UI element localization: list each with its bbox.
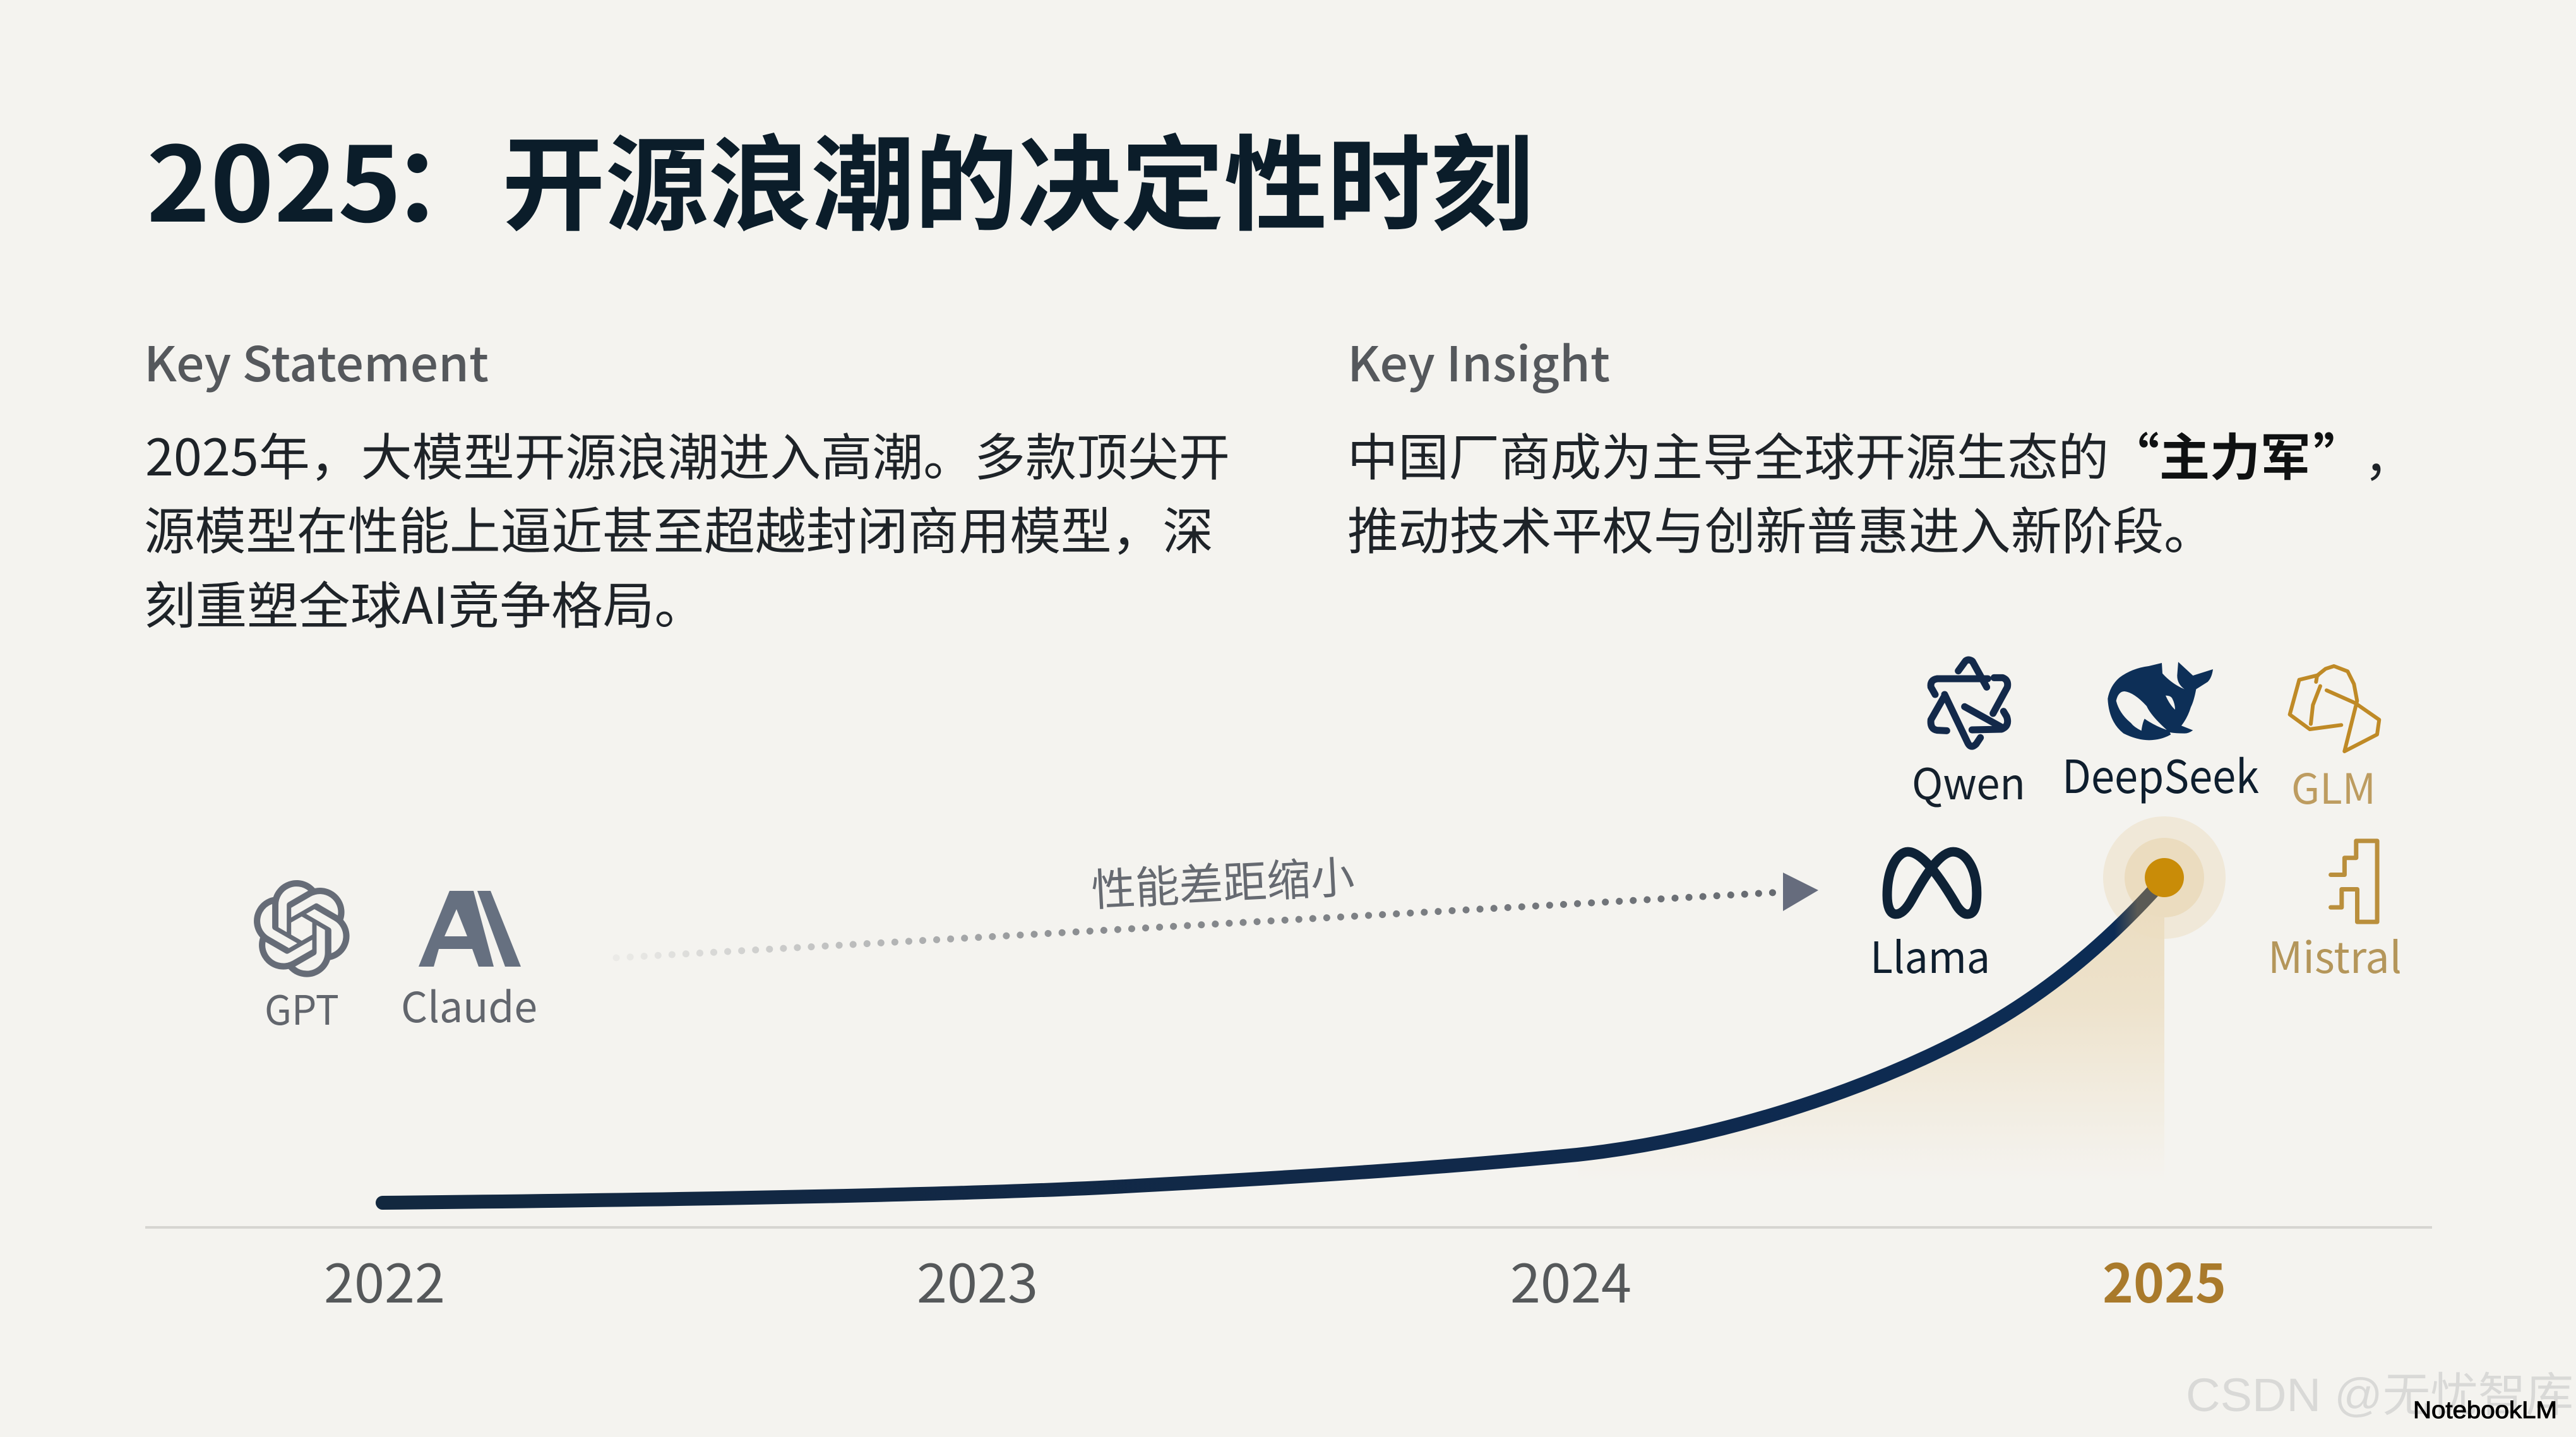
year label 2023: 2023 [917, 1242, 1038, 1318]
icon: Qwen star [1931, 660, 2008, 746]
text block: key statement body: 源模型在性能上逼近甚至超越封闭商用模型，深 [144, 491, 1213, 564]
text block: key insight body: ， [2364, 417, 2414, 491]
heading: key statement: Key Statement [144, 326, 489, 395]
dotted arrow line [616, 892, 1782, 958]
text block: key insight body: 中国厂商成为主导全球开源生态的 [1347, 417, 2109, 491]
year label 2025: 2025 [2102, 1242, 2226, 1318]
icon: OpenAI knot [254, 880, 350, 977]
watermark: NotebookLM: NotebookLM [2413, 1397, 2557, 1424]
chart: growth timeline [145, 816, 2432, 1318]
text block: key statement body: 2025年，大模型开源浪潮进入高潮。多款顶尖开 [145, 417, 1230, 491]
title: 2025 [146, 102, 402, 252]
model: Llama [1870, 852, 1990, 986]
label: Mistral [2268, 923, 2402, 986]
text block: key insight body: 推动技术平权与创新普惠进入新阶段。 [1347, 491, 2215, 564]
icon: Mistral stepped M [2331, 841, 2377, 922]
label: Claude [401, 974, 537, 1035]
label: Qwen [1912, 749, 2025, 812]
panel: key statement [144, 326, 1230, 639]
text block: key statement body [144, 417, 1230, 639]
label: DeepSeek [2062, 740, 2259, 806]
icon: GLM polygon knot [2290, 666, 2379, 751]
x axis line [145, 1226, 2432, 1229]
label: GLM [2291, 756, 2376, 816]
model: Qwen [1912, 660, 2025, 812]
model: DeepSeek [2062, 662, 2259, 806]
title: 开源浪潮的决定性时刻 [502, 102, 1534, 252]
chart area under curve [1578, 879, 2164, 1181]
arrow: performance gap narrowing [616, 842, 1818, 958]
icon: Meta infinity [1887, 852, 1977, 914]
model: Mistral [2268, 841, 2402, 986]
heading: key insight: Key Insight [1347, 326, 1610, 395]
panel: key insight [1347, 326, 2414, 564]
icon: Anthropic A\ [419, 891, 521, 967]
milestone dot 2025 [2145, 858, 2184, 897]
label: Llama [1870, 923, 1990, 986]
text block: key insight body: 主力军 [2159, 417, 2311, 491]
icon: whale [2108, 662, 2213, 740]
label: GPT [265, 979, 339, 1037]
text block: key insight body [1347, 417, 2414, 564]
watermark: CSDN: CSDN @无忧智库 [2186, 1369, 2573, 1421]
text block: key insight body: “ [2109, 417, 2159, 491]
text block: key statement body: 刻重塑全球AI竞争格局。 [144, 566, 706, 639]
text block: key insight body: ” [2313, 417, 2364, 491]
arrow label: 性能差距缩小 [1090, 842, 1356, 919]
model: Claude [401, 891, 537, 1035]
milestone halo rings [2103, 816, 2226, 939]
year label 2022: 2022 [324, 1242, 445, 1318]
year label 2024: 2024 [1510, 1242, 1631, 1318]
title: ： [391, 102, 495, 252]
model: GPT [254, 880, 350, 1037]
arrowhead [1783, 873, 1818, 911]
growth curve [383, 881, 2162, 1203]
model: GLM [2290, 666, 2379, 816]
